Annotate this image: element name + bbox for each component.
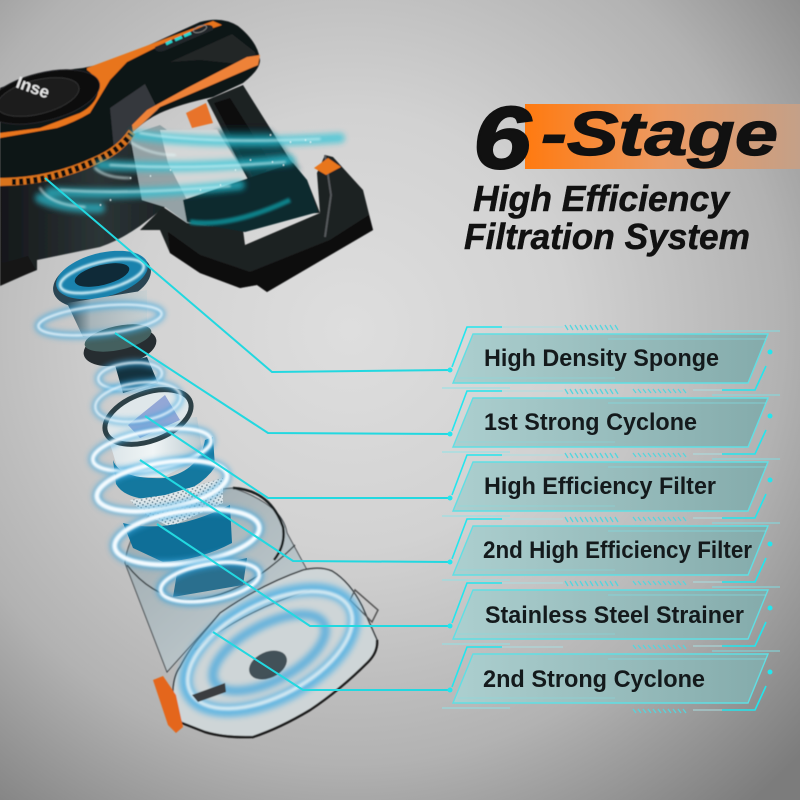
vent strip [0, 132, 132, 182]
stem [115, 357, 158, 393]
panel: 2nd Strong Cyclone [442, 647, 780, 713]
battery display [155, 24, 213, 52]
power button disc [0, 60, 105, 134]
panel: 2nd High Efficiency Filter [442, 517, 780, 585]
dark collar [80, 322, 160, 372]
airflow streaks [40, 133, 340, 208]
panel: High Efficiency Filter [442, 453, 780, 521]
label: High Efficiency Filter [484, 473, 716, 500]
orange title band [525, 104, 800, 169]
orange latch [153, 676, 183, 733]
battery pack [140, 155, 373, 292]
label: High Density Sponge [484, 345, 719, 372]
filter stack [37, 242, 263, 608]
head gloss [110, 84, 158, 150]
vacuum motor unit [0, 20, 373, 292]
heading: 6: 6 [473, 88, 532, 187]
label: 1st Strong Cyclone [484, 409, 697, 436]
translucent chamber [130, 125, 250, 225]
air inlet ring [47, 242, 157, 317]
label: 2nd High Efficiency Filter [483, 537, 752, 564]
panel: 1st Strong Cyclone [442, 389, 780, 457]
mesh filter [130, 478, 223, 527]
lower orange stripe [132, 55, 260, 132]
title block [464, 88, 800, 257]
clip [350, 590, 378, 622]
panel: High Density Sponge [442, 325, 780, 393]
dust cup [125, 488, 378, 737]
panel: Stainless Steel Strainer [442, 581, 780, 649]
leader lines [45, 178, 450, 690]
lower housing [0, 135, 165, 285]
blue collar [113, 437, 215, 500]
subheading line 2: Filtration System [464, 216, 750, 257]
heading: -Stage: -Stage [541, 100, 778, 169]
teal dust chamber [183, 163, 318, 232]
cone cylinder [67, 290, 147, 337]
lower base [166, 564, 378, 737]
grip teal glow [215, 130, 300, 185]
glowing swirl rings [37, 300, 263, 608]
battery latch [314, 158, 341, 175]
dust specks [100, 135, 311, 205]
logo: Inse [14, 73, 52, 102]
top orange stripe [0, 21, 222, 138]
trigger [186, 103, 213, 128]
bottom blue collar [123, 505, 232, 562]
label: 2nd Strong Cyclone [483, 666, 705, 693]
cup body [125, 488, 330, 672]
transparent window [160, 130, 248, 200]
foot bracket [0, 256, 36, 286]
first filter cylinder [98, 379, 203, 477]
subheading line 1: High Efficiency [473, 178, 731, 219]
main head shell [0, 20, 260, 182]
blue base swirl [166, 564, 374, 736]
label: Stainless Steel Strainer [485, 602, 744, 629]
center hub [244, 645, 292, 685]
handle grip [207, 85, 320, 215]
cup interior blue [173, 558, 247, 597]
